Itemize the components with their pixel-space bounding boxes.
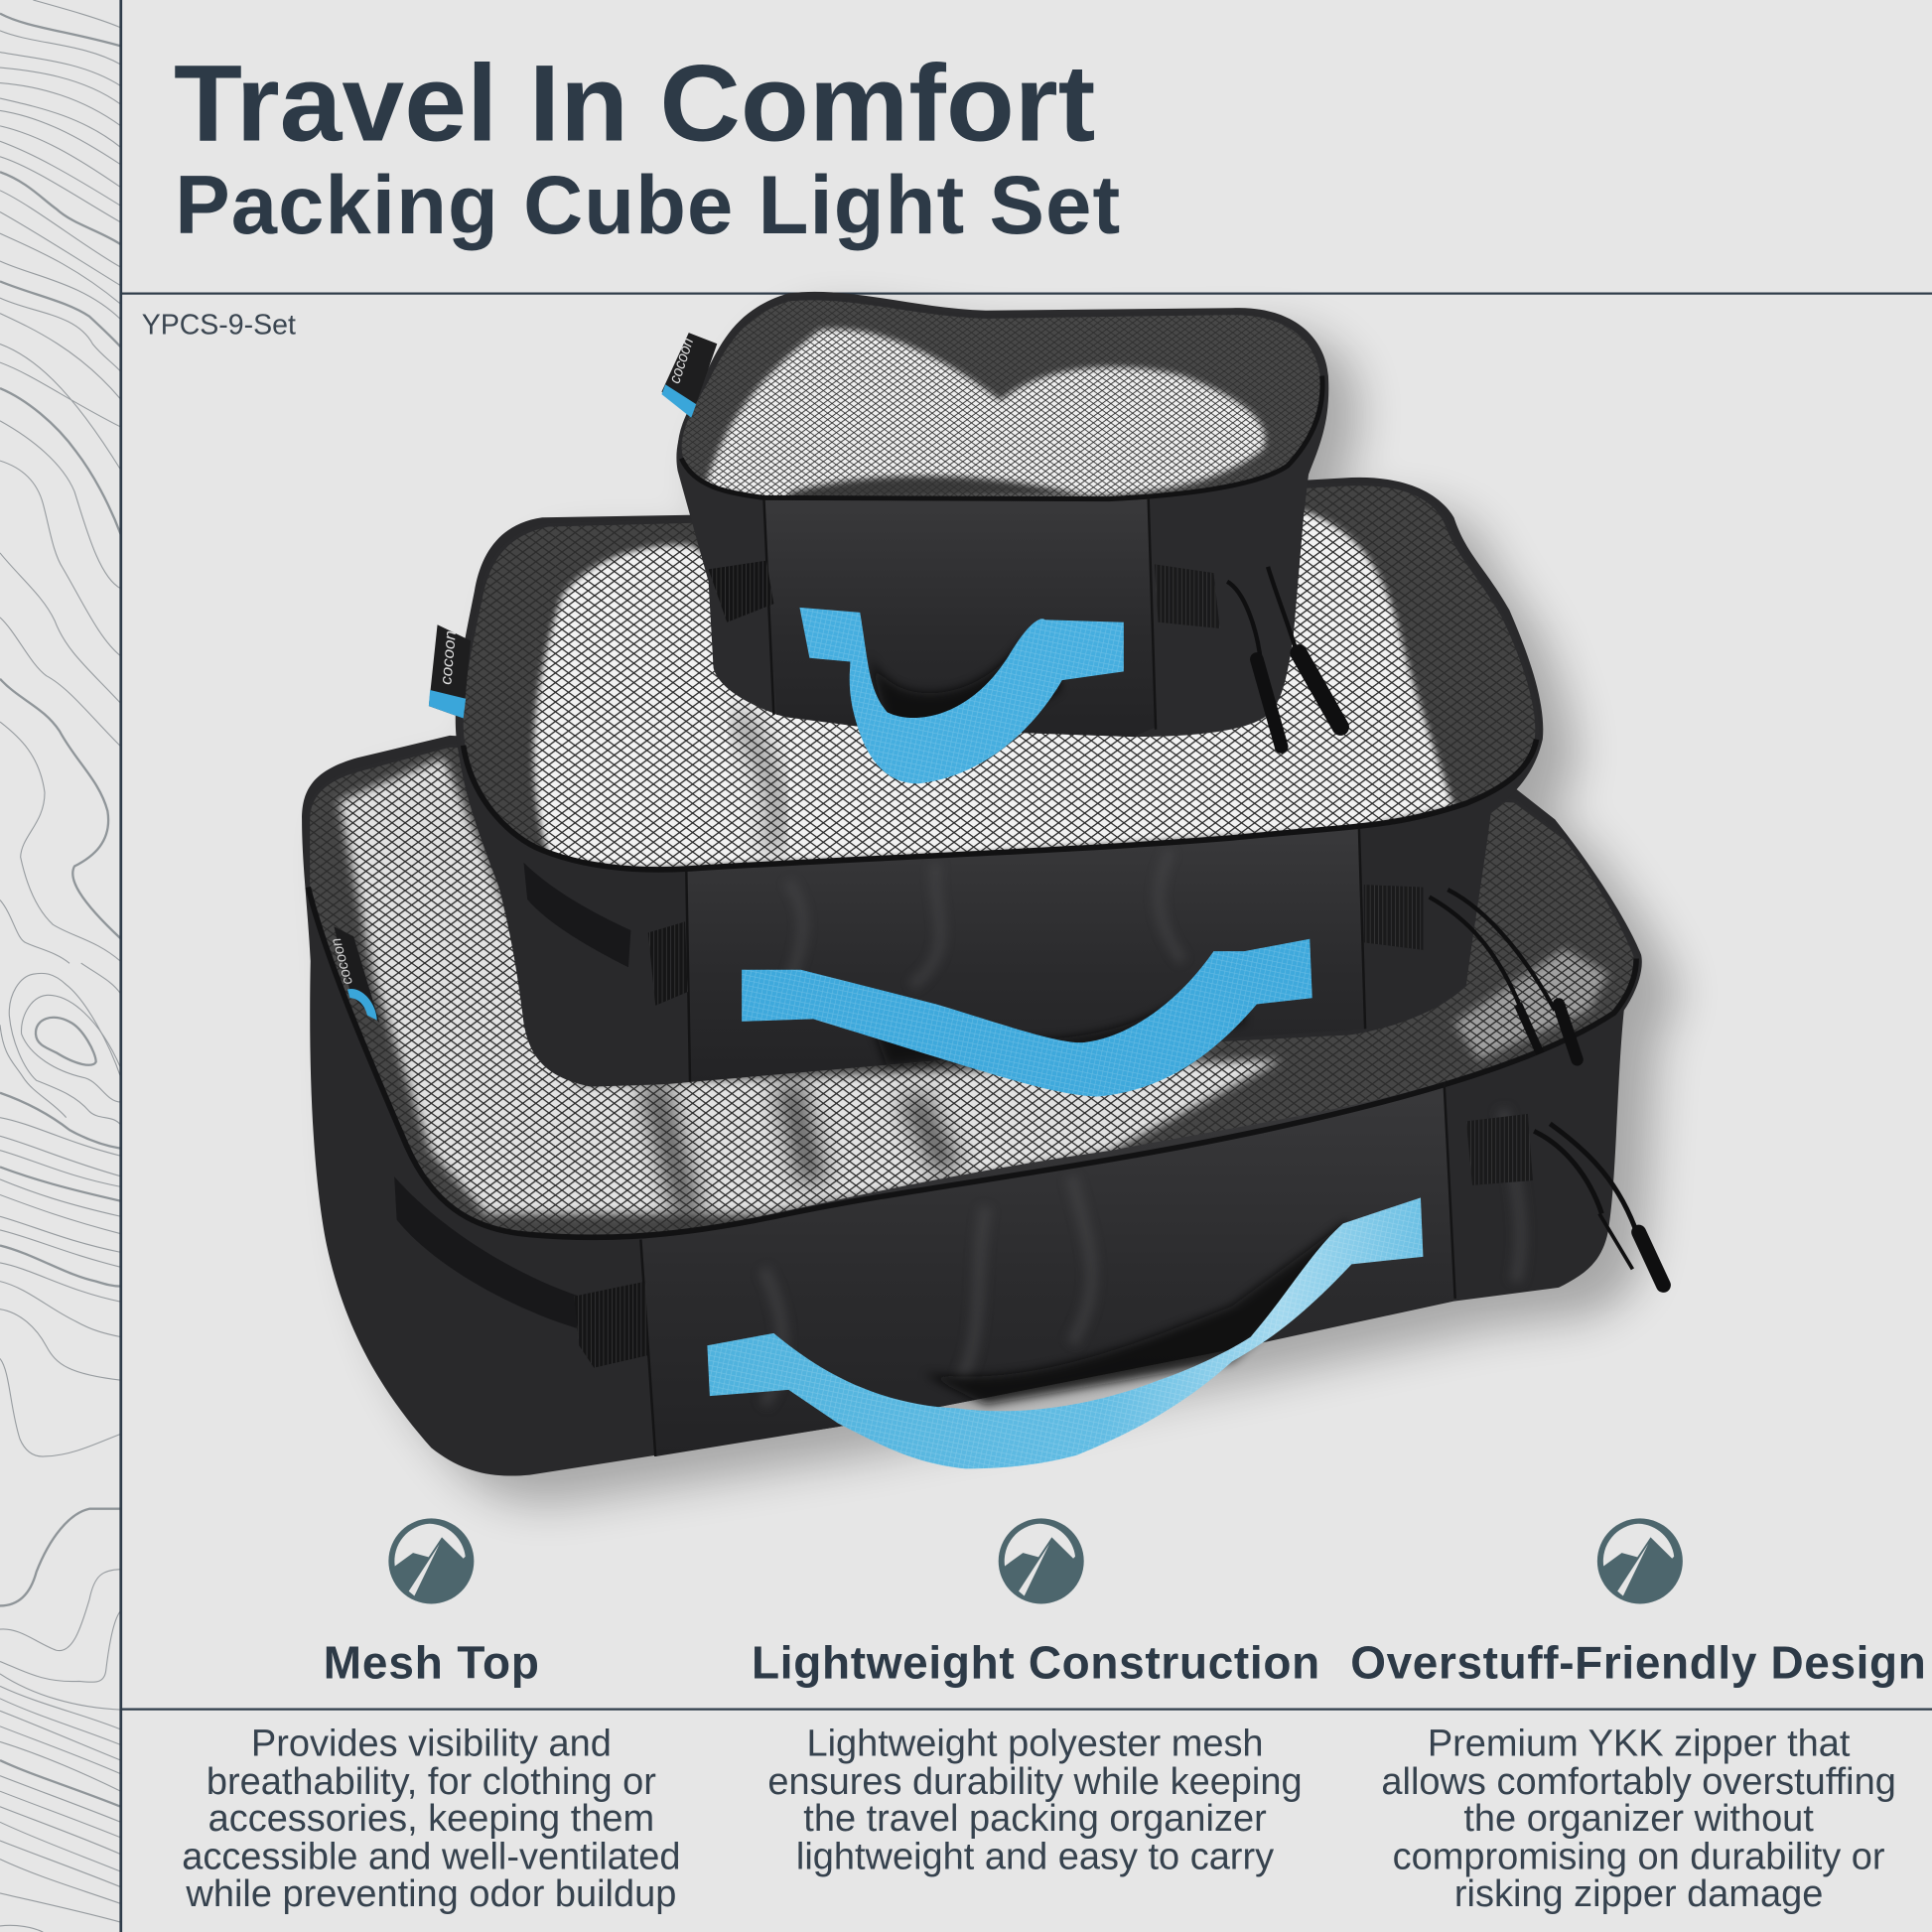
medium cube: rim piping bbox=[464, 740, 1537, 870]
large cube: zip pulls bbox=[1534, 1124, 1663, 1285]
topographic contour side strip bbox=[0, 0, 121, 1932]
small cube: right tab bbox=[1155, 564, 1220, 628]
description: Provides visibility and bbox=[251, 1724, 612, 1765]
description: lightweight and easy to carry bbox=[796, 1837, 1274, 1878]
medium cube bbox=[429, 478, 1578, 1097]
title: Travel In Comfort bbox=[174, 43, 1095, 164]
description: accessories, keeping them bbox=[208, 1798, 654, 1840]
large cube: shadow behind handle bbox=[924, 1220, 1349, 1405]
medium cube: seams bbox=[686, 828, 1365, 1082]
large cube: left zipper band bbox=[394, 1176, 579, 1328]
icon: mountain badge bbox=[1597, 1518, 1683, 1603]
medium cube: brand tag: cocoon bbox=[437, 629, 460, 685]
medium cube: zip pulls bbox=[1430, 890, 1578, 1059]
medium cube: handle bbox=[742, 939, 1312, 1097]
frame rule: under title bbox=[121, 293, 1932, 295]
large cube: seams bbox=[640, 1082, 1455, 1456]
description: Lightweight polyester mesh bbox=[806, 1724, 1264, 1765]
large cube: opening edge bbox=[308, 746, 1636, 1237]
large cube: mesh opening bbox=[308, 746, 1636, 1237]
small cube: left tab bbox=[709, 561, 773, 622]
description: compromising on durability or bbox=[1393, 1837, 1885, 1878]
large cube: fabric folds bbox=[763, 1109, 1521, 1405]
feature column: overstuff-friendly design bbox=[1350, 1518, 1926, 1915]
description: allows comfortably overstuffing bbox=[1381, 1761, 1896, 1803]
feature column: mesh top bbox=[182, 1518, 681, 1915]
small cube: seams bbox=[763, 499, 1156, 730]
description: the travel packing organizer bbox=[803, 1798, 1267, 1840]
small cube: handle bbox=[799, 608, 1124, 783]
description: accessible and well-ventilated bbox=[182, 1837, 681, 1878]
small cube: brand tag bbox=[661, 333, 717, 418]
medium cube: mesh opening bbox=[462, 483, 1537, 870]
large cube: left tab bbox=[574, 1282, 648, 1368]
frame rule: vertical bbox=[119, 0, 122, 1932]
small cube: front panel bbox=[763, 499, 1156, 737]
heading: Lightweight Construction bbox=[752, 1636, 1319, 1688]
description: ensures durability while keeping bbox=[767, 1761, 1303, 1803]
medium cube: shadow behind handle bbox=[863, 961, 1244, 1066]
medium cube: left zipper band bbox=[523, 863, 630, 967]
large cube: rim piping bbox=[308, 888, 1636, 1237]
medium cube: opening edge bbox=[462, 483, 1537, 870]
medium cube: left tab bbox=[648, 921, 688, 1006]
large cube: brand tag: cocoon bbox=[329, 936, 356, 986]
feature column: lightweight construction bbox=[752, 1518, 1319, 1878]
small cube: brand tag: cocoon bbox=[666, 336, 697, 385]
heading: Mesh Top bbox=[324, 1636, 539, 1688]
description: Premium YKK zipper that bbox=[1428, 1724, 1851, 1765]
description: while preventing odor buildup bbox=[185, 1873, 676, 1915]
medium cube: fabric folds bbox=[789, 896, 1181, 985]
icon: mountain badge bbox=[999, 1518, 1084, 1603]
large cube: brand tag bbox=[329, 926, 379, 1023]
description: the organizer without bbox=[1463, 1798, 1814, 1840]
small cube: zip pulls bbox=[1227, 567, 1340, 747]
small cube: shadow behind handle bbox=[869, 628, 1059, 733]
large cube: front panel bbox=[640, 1082, 1455, 1456]
model number: YPCS-9-Set bbox=[142, 309, 296, 341]
subtitle: Packing Cube Light Set bbox=[175, 159, 1120, 251]
medium cube: front panel bbox=[686, 828, 1365, 1082]
frame rule: above descriptions bbox=[121, 1708, 1932, 1711]
large cube: handle bbox=[707, 1197, 1423, 1468]
small cube bbox=[661, 292, 1340, 783]
small cube: mesh opening bbox=[680, 298, 1322, 502]
description: breathability, for clothing or bbox=[207, 1761, 656, 1803]
description: risking zipper damage bbox=[1454, 1873, 1823, 1915]
product photo: three stacked packing cubes bbox=[302, 292, 1677, 1503]
icon: mountain badge bbox=[388, 1518, 474, 1603]
medium cube: brand tag bbox=[429, 624, 471, 719]
heading: Overstuff-Friendly Design bbox=[1350, 1636, 1926, 1688]
small cube: opening edge bbox=[680, 298, 1322, 499]
large cube bbox=[302, 736, 1663, 1476]
large cube: right tab bbox=[1466, 1114, 1533, 1185]
medium cube: right tab bbox=[1364, 885, 1423, 950]
small cube: rim piping bbox=[681, 376, 1322, 499]
cast shadows bbox=[337, 314, 1677, 1503]
